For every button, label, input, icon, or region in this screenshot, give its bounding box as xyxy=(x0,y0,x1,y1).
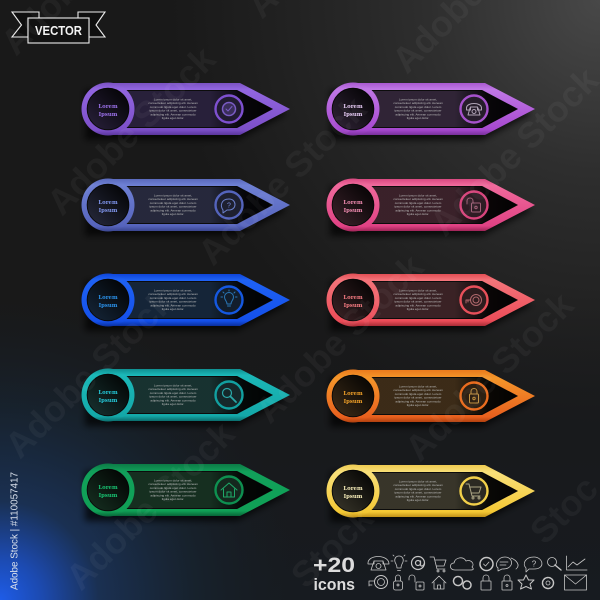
text block: commodo ligula eget dolor. Lorem xyxy=(150,105,197,109)
text block: Lorem ipsum dolor sit amet, xyxy=(399,194,437,198)
text block: ligula eget dolor. xyxy=(407,212,429,216)
text block: Lorem ipsum dolor sit amet, xyxy=(399,480,437,484)
icon: lock xyxy=(460,382,488,410)
watermark: Adobe Stock xyxy=(247,245,432,431)
label: Lorem xyxy=(343,200,363,206)
panel: pink card with open lock xyxy=(326,178,535,236)
panel: yellow card with cart xyxy=(326,464,535,522)
text block: Lorem ipsum dolor sit amet, xyxy=(399,288,437,292)
label: Lorem xyxy=(343,391,363,397)
panel: purple card with clock xyxy=(82,82,290,140)
label: Lorem xyxy=(343,486,363,492)
text block: adipiscing elit. Aenean commodo xyxy=(395,208,441,212)
text block: ipsum dolor sit amet, consectetuer xyxy=(149,109,197,113)
panel: indigo card with question bubble xyxy=(82,178,290,236)
panel: orange card with lock xyxy=(326,370,535,427)
icon: question bubble xyxy=(216,192,242,218)
label: Lorem xyxy=(98,104,118,110)
label: Ipsum xyxy=(99,398,118,404)
text block: ligula eget dolor. xyxy=(407,307,429,311)
icon set: ? xyxy=(532,560,537,568)
text block: ligula eget dolor. xyxy=(407,116,429,120)
icon: cart xyxy=(460,478,488,504)
text block: ipsum dolor sit amet, consectetuer xyxy=(149,395,197,399)
text block: ipsum dolor sit amet, consectetuer xyxy=(149,300,197,304)
panel: red card with key target xyxy=(326,274,535,331)
label: Lorem xyxy=(343,104,363,110)
text block: ipsum dolor sit amet, consectetuer xyxy=(149,205,197,209)
label: Ipsum xyxy=(344,494,363,500)
icon: question bubble: ? xyxy=(227,202,231,210)
text block: commodo ligula eget dolor. Lorem xyxy=(150,486,197,490)
text block: Lorem ipsum dolor sit amet, xyxy=(154,384,192,388)
text block: adipiscing elit. Aenean commodo xyxy=(395,303,441,307)
text block: adipiscing elit. Aenean commodo xyxy=(150,303,196,307)
badge: vector ribbon: VECTOR xyxy=(35,24,82,38)
text block: ligula eget dolor. xyxy=(162,307,184,311)
watermark: Adobe Stock xyxy=(0,280,182,466)
label: Lorem xyxy=(98,485,118,491)
text block: adipiscing elit. Aenean commodo xyxy=(150,493,196,497)
heading: +20 icons xyxy=(313,553,355,594)
panel: violet card with phone xyxy=(326,82,535,140)
text block: consectetuer adipiscing elit. Aenean xyxy=(148,292,198,296)
text block: adipiscing elit. Aenean commodo xyxy=(395,112,441,116)
text block: commodo ligula eget dolor. Lorem xyxy=(395,392,442,396)
text block: consectetuer adipiscing elit. Aenean xyxy=(148,387,198,391)
text block: consectetuer adipiscing elit. Aenean xyxy=(393,388,443,392)
text block: commodo ligula eget dolor. Lorem xyxy=(150,391,197,395)
label: Lorem xyxy=(98,200,118,206)
text block: adipiscing elit. Aenean commodo xyxy=(395,399,441,403)
stock id text: Adobe Stock | #110057417 xyxy=(8,472,20,590)
watermark: Adobe Stock xyxy=(397,283,582,469)
watermark: Stock xyxy=(283,497,382,596)
text block: ligula eget dolor. xyxy=(162,212,184,216)
label: Ipsum xyxy=(344,208,363,214)
icon set xyxy=(368,555,587,590)
label: Ipsum xyxy=(344,399,363,405)
text block: consectetuer adipiscing elit. Aenean xyxy=(393,292,443,296)
icon: house xyxy=(216,476,242,504)
text block: ipsum dolor sit amet, consectetuer xyxy=(394,491,442,495)
icon: clock xyxy=(216,96,242,122)
heading: +20 icons: +20 xyxy=(313,553,355,577)
text block: ligula eget dolor. xyxy=(162,497,184,501)
label: Lorem xyxy=(343,295,363,301)
text block: ipsum dolor sit amet, consectetuer xyxy=(149,490,197,494)
text block: consectetuer adipiscing elit. Aenean xyxy=(393,197,443,201)
text block: adipiscing elit. Aenean commodo xyxy=(150,398,196,402)
label: Lorem xyxy=(98,295,118,301)
label: Ipsum xyxy=(99,303,118,309)
text block: commodo ligula eget dolor. Lorem xyxy=(395,487,442,491)
text block: ipsum dolor sit amet, consectetuer xyxy=(394,109,442,113)
panel: blue card with light bulb xyxy=(82,274,290,331)
text block: ligula eget dolor. xyxy=(407,403,429,407)
label: Ipsum xyxy=(99,493,118,499)
text block: consectetuer adipiscing elit. Aenean xyxy=(393,483,443,487)
text block: consectetuer adipiscing elit. Aenean xyxy=(148,482,198,486)
label: Lorem xyxy=(98,390,118,396)
icon: open lock xyxy=(460,192,488,218)
badge: vector ribbon xyxy=(12,12,105,43)
watermark: Adobe Stock xyxy=(58,412,243,598)
text block: adipiscing elit. Aenean commodo xyxy=(150,208,196,212)
text block: commodo ligula eget dolor. Lorem xyxy=(395,105,442,109)
text block: Lorem ipsum dolor sit amet, xyxy=(399,384,437,388)
text block: commodo ligula eget dolor. Lorem xyxy=(150,201,197,205)
text block: consectetuer adipiscing elit. Aenean xyxy=(148,197,198,201)
icon: key target xyxy=(460,286,488,314)
text block: ligula eget dolor. xyxy=(162,402,184,406)
text block: ligula eget dolor. xyxy=(407,498,429,502)
watermark: Adobe Stock xyxy=(39,37,224,223)
icon: telephone xyxy=(460,96,488,122)
text block: ligula eget dolor. xyxy=(162,116,184,120)
label: Ipsum xyxy=(344,303,363,309)
text block: commodo ligula eget dolor. Lorem xyxy=(150,296,197,300)
heading: +20 icons: icons xyxy=(314,576,355,594)
text block: commodo ligula eget dolor. Lorem xyxy=(395,201,442,205)
text block: adipiscing elit. Aenean commodo xyxy=(150,112,196,116)
label: Ipsum xyxy=(99,112,118,118)
text block: Lorem ipsum dolor sit amet, xyxy=(154,194,192,198)
text block: consectetuer adipiscing elit. Aenean xyxy=(148,101,198,105)
text block: ipsum dolor sit amet, consectetuer xyxy=(394,396,442,400)
text block: ipsum dolor sit amet, consectetuer xyxy=(394,205,442,209)
text block: Lorem ipsum dolor sit amet, xyxy=(399,98,437,102)
text block: Lorem ipsum dolor sit amet, xyxy=(154,98,192,102)
text block: adipiscing elit. Aenean commodo xyxy=(395,494,441,498)
label: Ipsum xyxy=(344,112,363,118)
icon: light bulb xyxy=(216,286,242,314)
text block: ipsum dolor sit amet, consectetuer xyxy=(394,300,442,304)
panel: teal card with magnifier xyxy=(82,368,290,426)
text block: consectetuer adipiscing elit. Aenean xyxy=(393,101,443,105)
icon: magnifier xyxy=(216,382,242,408)
panel: green card with house xyxy=(82,464,290,521)
text block: Lorem ipsum dolor sit amet, xyxy=(154,478,192,482)
text block: Lorem ipsum dolor sit amet, xyxy=(154,288,192,292)
watermark: Adobe Stock xyxy=(190,87,375,273)
label: Ipsum xyxy=(99,208,118,214)
text block: commodo ligula eget dolor. Lorem xyxy=(395,296,442,300)
